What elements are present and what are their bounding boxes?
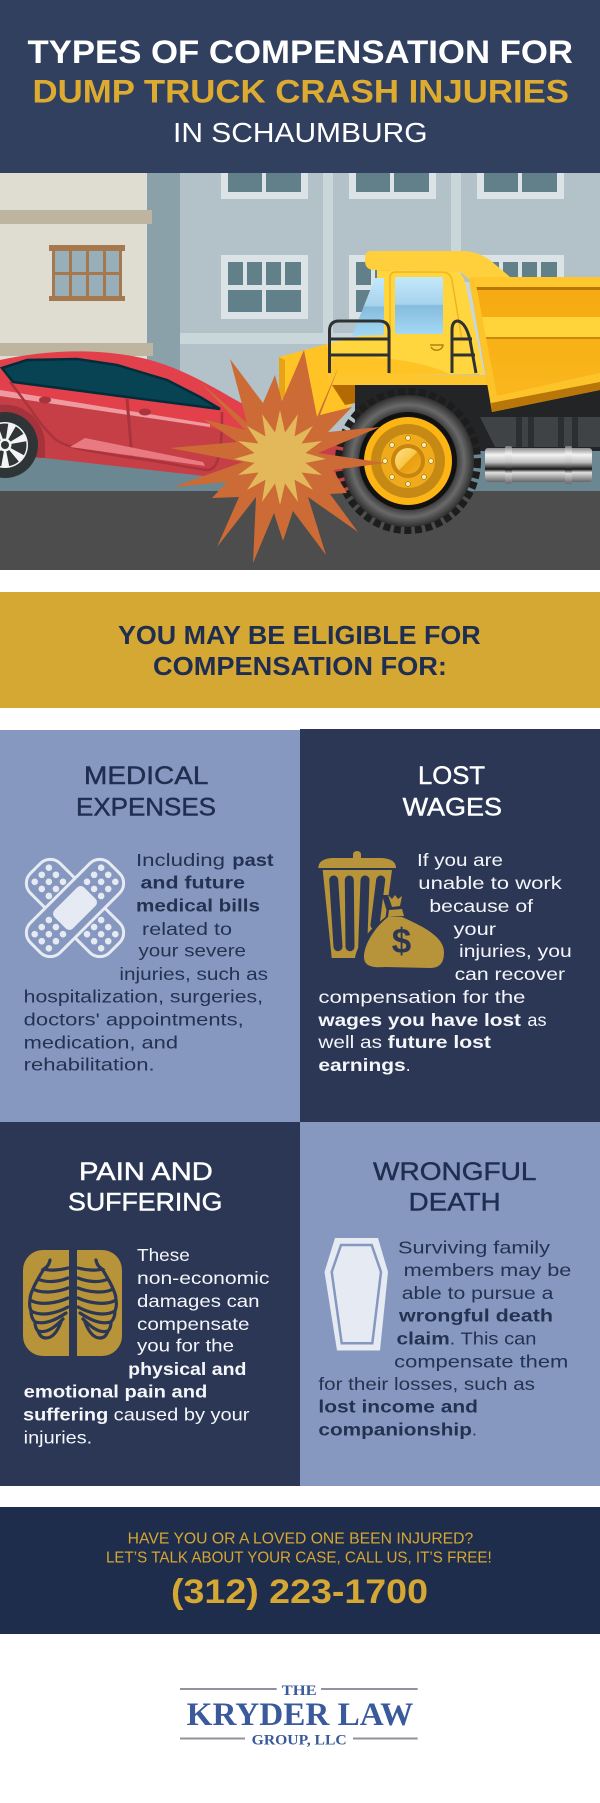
car wheel xyxy=(0,405,45,478)
illustration: dump truck crash scene xyxy=(0,173,600,570)
body text: wrongful death: able to pursue a xyxy=(402,1283,554,1303)
gold eligibility banner xyxy=(0,592,600,708)
body text: wrongful death xyxy=(318,1237,571,1440)
body text: pain and suffering: non-economic xyxy=(137,1268,270,1288)
body text: pain and suffering: caused by your xyxy=(114,1405,250,1425)
logo: The Kryder Law Group xyxy=(180,1683,418,1748)
body text: medical expenses: medication, and xyxy=(24,1032,178,1052)
body text: medical expenses: hospitalization, surgeries, xyxy=(24,987,263,1007)
body text: wrongful death: . xyxy=(472,1420,477,1440)
body text: wrongful death: claim xyxy=(396,1328,450,1348)
heading: medical expenses: EXPENSES xyxy=(76,794,216,822)
body text: wrongful death: wrongful death xyxy=(398,1306,553,1326)
body text: lost wages: compensation for the xyxy=(318,987,526,1007)
body text: lost wages: well as xyxy=(317,1032,382,1052)
body text: pain and suffering: physical and xyxy=(128,1359,246,1379)
truck wheel xyxy=(339,392,477,530)
title line three: IN SCHAUMBURG xyxy=(173,117,428,148)
body text: lost wages: as xyxy=(527,1010,547,1030)
body text: pain and suffering: suffering xyxy=(23,1405,108,1425)
body text: medical expenses: rehabilitation. xyxy=(24,1055,155,1075)
body text: pain and suffering: compensate xyxy=(137,1314,250,1334)
body text: medical expenses: past xyxy=(232,850,274,870)
body text: pain and suffering: you for the xyxy=(137,1336,234,1356)
body text: lost wages: earnings xyxy=(318,1055,406,1075)
body text: wrongful death: lost income and xyxy=(318,1397,478,1417)
body text: lost wages: because of xyxy=(429,896,533,916)
banner text: COMPENSATION FOR: xyxy=(153,651,447,681)
body text: lost wages: can recover xyxy=(455,964,565,984)
banner text: YOU MAY BE ELIGIBLE FOR xyxy=(118,620,481,650)
body text: pain and suffering: These xyxy=(137,1245,190,1265)
panel: lost wages xyxy=(300,729,600,1122)
heading: lost wages xyxy=(403,762,502,822)
body text: pain and suffering: emotional pain and xyxy=(24,1382,207,1402)
body text: lost wages: unable to work xyxy=(418,873,562,893)
body text: medical expenses: doctors' appointments, xyxy=(24,1010,244,1030)
panel: wrongful death xyxy=(300,1122,600,1486)
body text: lost wages: your xyxy=(454,919,496,939)
body text: medical expenses: Including xyxy=(136,850,225,870)
red car xyxy=(0,351,348,492)
body text: wrongful death: for their losses, such as xyxy=(318,1374,535,1394)
title line one: TYPES OF COMPENSATION FOR xyxy=(28,34,573,70)
body text: lost wages: injuries, you xyxy=(459,941,572,961)
dump truck xyxy=(279,251,600,530)
call to action text: LET’S TALK ABOUT YOUR CASE, CALL US, IT’S FREE! xyxy=(106,1549,492,1566)
heading: pain and suffering xyxy=(68,1158,222,1217)
banner text xyxy=(118,620,481,681)
body text: pain and suffering: damages can xyxy=(137,1291,260,1311)
body text: wrongful death: members may be xyxy=(404,1260,571,1280)
heading: wrongful death: WRONGFUL xyxy=(373,1158,537,1186)
icon: trash can with money bag: $ xyxy=(392,922,411,961)
call to action band xyxy=(0,1507,600,1634)
title line two: DUMP TRUCK CRASH INJURIES xyxy=(32,74,569,110)
body text: lost wages: . xyxy=(406,1055,411,1075)
heading: lost wages: WAGES xyxy=(403,794,502,822)
dump bed xyxy=(469,277,600,412)
body text: lost wages: If you are xyxy=(417,850,503,870)
icon: coffin xyxy=(324,1238,388,1350)
body text: medical expenses: related to xyxy=(142,919,232,939)
exhaust pipe xyxy=(485,446,592,484)
body text: pain and suffering xyxy=(23,1245,270,1447)
body text: lost wages xyxy=(317,850,572,1075)
icon: trash can with money bag xyxy=(318,851,450,975)
chassis xyxy=(355,385,600,451)
explosion xyxy=(170,350,385,563)
logo: The Kryder Law Group: KRYDER LAW xyxy=(187,1697,413,1733)
body text: medical expenses xyxy=(24,850,274,1075)
building background xyxy=(0,173,600,491)
platform xyxy=(328,375,488,385)
body text: medical expenses: your severe xyxy=(138,941,246,961)
logo: The Kryder Law Group: THE xyxy=(282,1683,317,1699)
cab xyxy=(464,282,488,375)
body text: medical expenses: and future xyxy=(140,873,245,893)
heading: pain and suffering: SUFFERING xyxy=(68,1189,222,1217)
call to action text xyxy=(106,1530,492,1566)
body text: wrongful death: companionship xyxy=(318,1420,472,1440)
body text: medical expenses: medical bills xyxy=(136,896,260,916)
road xyxy=(0,491,600,570)
heading: lost wages: LOST xyxy=(418,762,485,790)
icon: rib cage xyxy=(23,1250,122,1356)
handrails xyxy=(330,321,476,373)
body text: lost wages: wages you have lost xyxy=(317,1010,521,1030)
logo: The Kryder Law Group: GROUP, LLC xyxy=(252,1732,347,1748)
body text: wrongful death: Surviving family xyxy=(398,1237,550,1257)
panel: medical expenses xyxy=(0,730,300,1122)
body text: wrongful death: . This can xyxy=(450,1328,536,1348)
heading: medical expenses: MEDICAL xyxy=(84,762,209,790)
heading: medical expenses xyxy=(76,762,216,822)
heading: wrongful death: DEATH xyxy=(409,1189,501,1217)
phone number: (312) 223-1700 xyxy=(171,1573,428,1611)
heading: wrongful death xyxy=(373,1158,537,1217)
header panel xyxy=(0,0,600,173)
body text: pain and suffering: injuries. xyxy=(24,1427,92,1447)
icon: crossed bandages xyxy=(21,854,129,962)
heading: pain and suffering: PAIN AND xyxy=(79,1158,213,1186)
body text: medical expenses: injuries, such as xyxy=(119,964,268,984)
body text: wrongful death: compensate them xyxy=(394,1351,568,1371)
body text: lost wages: future lost xyxy=(388,1032,491,1052)
call to action text: HAVE YOU OR A LOVED ONE BEEN INJURED? xyxy=(128,1530,474,1547)
panel: pain and suffering xyxy=(0,1122,300,1486)
